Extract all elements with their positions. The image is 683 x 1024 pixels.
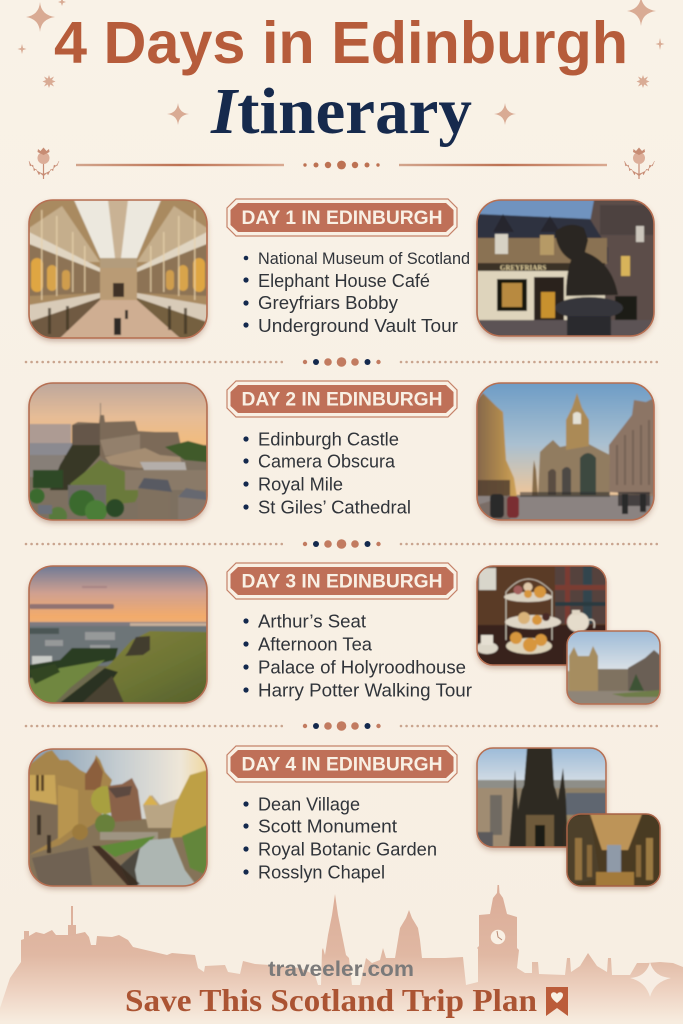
day 2 list: [243, 430, 411, 518]
clock on tower: [491, 930, 505, 944]
photo: Greyfriars Bobby: GREYFRIARS: [500, 264, 546, 272]
day 3 list: Harry Potter Walking Tour: [258, 680, 472, 700]
day 2 list: Camera Obscura: [258, 452, 396, 472]
divider 1: [26, 357, 657, 367]
day 3 list: [243, 612, 472, 700]
day 1 list: [243, 250, 470, 336]
photo: St Giles' Cathedral: [477, 383, 654, 520]
day 4 list: [243, 794, 437, 882]
header divider: [29, 148, 654, 179]
day 4 list: Rosslyn Chapel: [258, 862, 385, 882]
day 4 banner: [227, 746, 457, 782]
day 2 banner: DAY 2 IN EDINBURGH: [242, 388, 442, 410]
divider 2: [26, 539, 657, 549]
panel: day 2: [29, 381, 654, 525]
photo: Palace of Holyroodhouse: [567, 631, 660, 704]
subtitle: Itinerary: Itinerary: [210, 75, 472, 148]
day 2 banner: [227, 381, 457, 417]
day 3 list: Afternoon Tea: [258, 634, 373, 654]
icon: right thistle: [624, 148, 654, 179]
icon: left thistle: [29, 148, 59, 179]
photo: Arthur's Seat: [29, 566, 207, 703]
day 1 banner: DAY 1 IN EDINBURGH: [242, 207, 442, 229]
day 1 list: National Museum of Scotland: [258, 250, 470, 268]
day 4 list: Scott Monument: [258, 816, 397, 836]
skyline silhouette: [0, 885, 683, 1024]
icon: bookmark: [546, 987, 568, 1016]
photo: Greyfriars Bobby: [477, 200, 654, 336]
day 2 list: St Giles’ Cathedral: [258, 498, 411, 518]
decorative sparkles: [18, 0, 664, 125]
panel: day 4: [29, 746, 660, 886]
photo: National Museum of Scotland: [29, 200, 207, 338]
photo: Edinburgh Castle: [29, 383, 207, 525]
day 2 list: Royal Mile: [258, 474, 343, 494]
day 4 list: Royal Botanic Garden: [258, 840, 437, 860]
panel: day 1: [29, 199, 654, 338]
day 1 banner: [227, 199, 457, 236]
website label: traveeler.com: [268, 958, 414, 981]
day 3 list: Palace of Holyroodhouse: [258, 658, 466, 678]
day 4 banner: DAY 4 IN EDINBURGH: [242, 754, 442, 776]
decorative sparkle in skyline: [630, 962, 671, 997]
day 3 banner: [227, 563, 457, 599]
day 3 list: Arthur’s Seat: [258, 612, 366, 632]
day 1 list: Elephant House Café: [258, 271, 430, 291]
day 3 banner: DAY 3 IN EDINBURGH: [242, 570, 442, 592]
divider 3: [26, 721, 657, 731]
day 4 list: Dean Village: [258, 794, 360, 814]
photo: Afternoon Tea: [476, 566, 606, 665]
photo: Scott Monument: [477, 748, 606, 847]
photo: Rosslyn Chapel: [567, 814, 660, 886]
day 1 list: Greyfriars Bobby: [258, 293, 398, 313]
day 2 list: Edinburgh Castle: [258, 430, 399, 450]
call to action: Save This Scotland Trip Plan: [125, 982, 537, 1018]
panel: day 3: [29, 563, 660, 704]
photo: Dean Village: [29, 749, 207, 886]
day 1 list: Underground Vault Tour: [258, 316, 458, 336]
title: 4 Days in Edinburgh: [54, 10, 628, 76]
